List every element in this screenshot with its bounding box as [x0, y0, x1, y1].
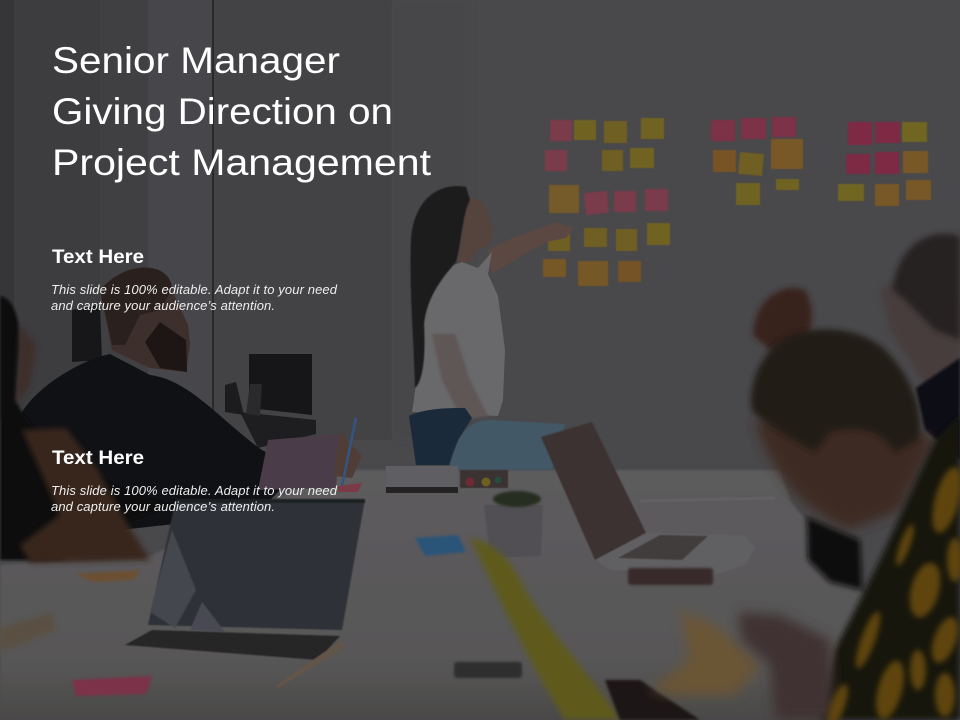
body text 1: and capture your audience’s attention. [51, 298, 275, 313]
dark shirt [18, 354, 300, 530]
forearm [432, 334, 488, 420]
man with beard [18, 267, 300, 530]
blue notes on table [415, 535, 466, 556]
presenter woman at the board [409, 186, 574, 465]
notebook and pen cup [386, 466, 508, 493]
centre laptop [541, 422, 755, 575]
raised arm [488, 222, 574, 274]
face [458, 198, 493, 262]
orange note [76, 570, 140, 582]
sticky notes: left group [543, 118, 670, 286]
heading 1: Text Here [52, 247, 144, 268]
title: Project Management [52, 142, 432, 183]
body text 2 [51, 483, 338, 514]
yellow patterned shirt [824, 464, 960, 720]
tan note left [0, 612, 56, 652]
left window wall [0, 0, 470, 440]
face [755, 410, 935, 530]
text block 1 [51, 247, 338, 313]
chair back [72, 305, 102, 362]
plant pot [484, 491, 543, 558]
body text 1: This slide is 100% editable. Adapt it to your need [51, 282, 338, 297]
black collar [820, 415, 960, 720]
body text 1 [51, 282, 338, 313]
front left laptop [125, 499, 365, 688]
black mask shadow [807, 517, 862, 590]
phone on table [628, 568, 713, 585]
arm [20, 428, 150, 563]
blue chair [448, 420, 565, 470]
long hair [411, 186, 470, 388]
hair [751, 329, 920, 452]
woman on left edge [0, 296, 175, 563]
body text 2: and capture your audience’s attention. [51, 499, 275, 514]
desk with dark monitor and phones [225, 354, 316, 448]
body text 2: This slide is 100% editable. Adapt it to your need [51, 483, 338, 498]
marker on table [454, 662, 522, 678]
white t-shirt [412, 252, 505, 416]
hands [738, 612, 835, 720]
hair and face [100, 267, 190, 372]
heading 2: Text Here [52, 448, 144, 469]
title: Senior Manager [52, 40, 340, 81]
yellow paper in foreground [470, 538, 620, 720]
orange notes in foreground [650, 610, 760, 695]
pink note [72, 676, 152, 696]
text block 2 [51, 448, 338, 514]
title: Giving Direction on [52, 91, 393, 132]
tablet with hand and blue pen [258, 418, 362, 492]
person with glasses, top right [880, 234, 960, 460]
bun [753, 288, 812, 350]
table [0, 470, 960, 720]
dark object bottom [605, 680, 700, 720]
sticky notes: middle group [711, 117, 803, 205]
sticky notes: right group [838, 122, 931, 206]
jeans [409, 408, 472, 465]
woman in foreground with bun [738, 288, 960, 720]
title [52, 40, 432, 183]
